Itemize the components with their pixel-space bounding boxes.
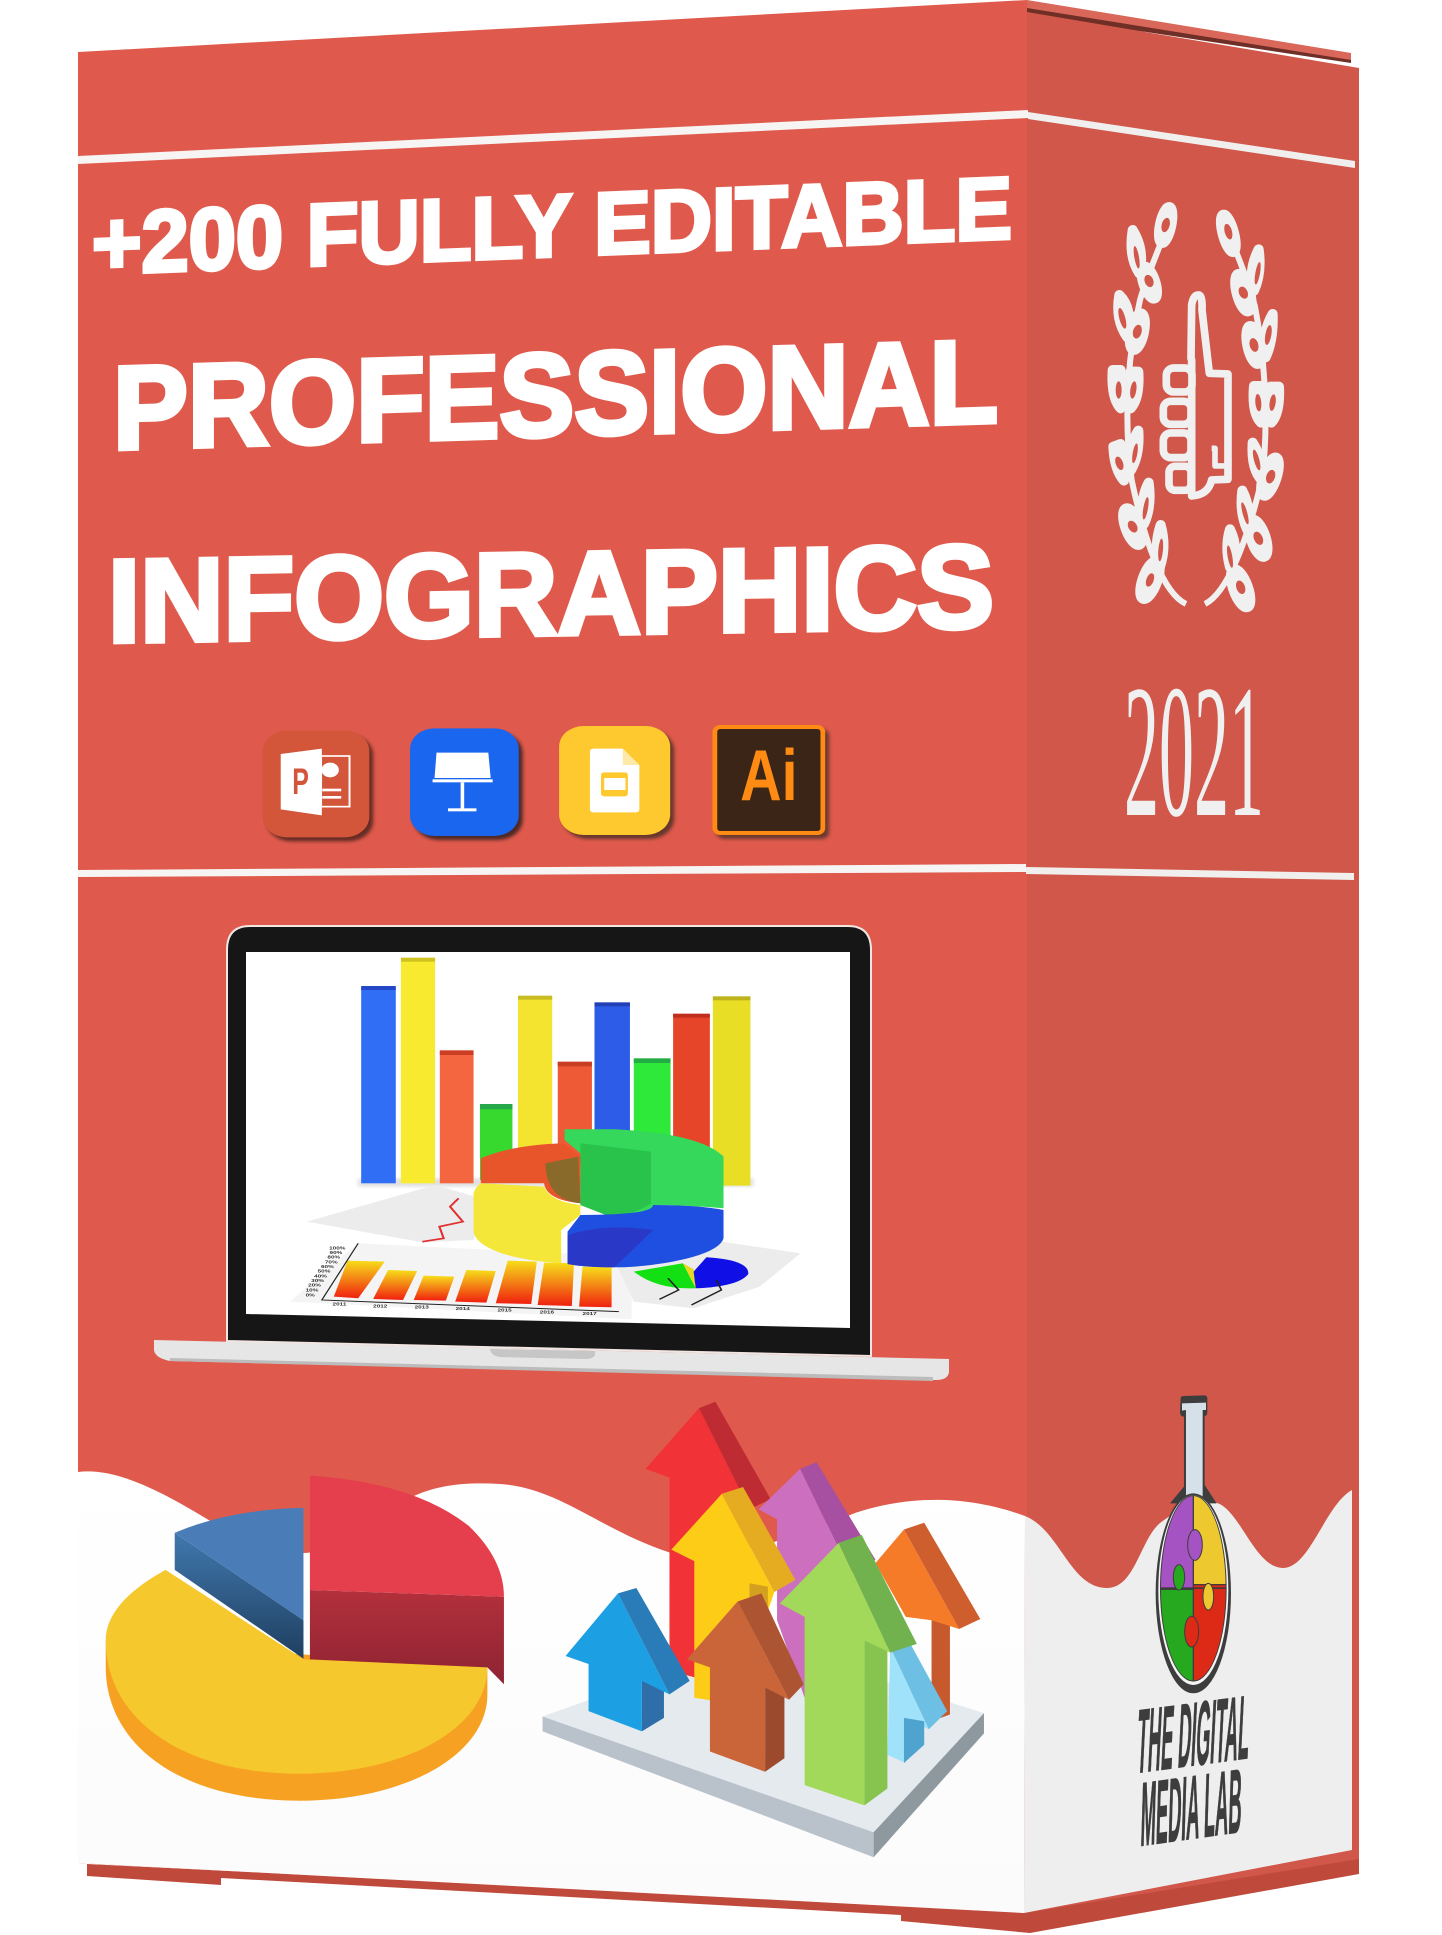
bar graph paper: 2017 xyxy=(583,1311,597,1317)
flask bulb xyxy=(1156,1493,1231,1693)
front white wave xyxy=(78,1471,1025,1913)
bar graph paper: 20% xyxy=(308,1283,321,1288)
bar graph paper: 2011 xyxy=(333,1302,347,1307)
laptop screen xyxy=(246,952,850,1328)
bar graph paper: 30% xyxy=(311,1278,324,1284)
puzzle pieces xyxy=(1160,1493,1227,1683)
flask logo xyxy=(1156,1395,1231,1693)
red arrow xyxy=(646,1402,771,1681)
3d arrows chart xyxy=(543,1402,984,1857)
box lid top edge xyxy=(1027,0,1351,63)
bar graph paper: 70% xyxy=(325,1260,338,1265)
box side panel xyxy=(1024,12,1359,1913)
icon: powerpoint xyxy=(263,731,373,841)
brown arrow xyxy=(687,1593,804,1772)
bar graph paper: 50% xyxy=(318,1269,330,1274)
icon: adobe illustrator xyxy=(715,727,829,839)
heading: professional: PROFESSIONAL xyxy=(113,316,998,475)
yellow arrow xyxy=(671,1487,795,1704)
green arrow xyxy=(780,1535,917,1805)
orange arrow xyxy=(875,1523,980,1721)
flask neck xyxy=(1170,1395,1217,1503)
purple arrow xyxy=(759,1462,875,1698)
screen chart image xyxy=(290,958,800,1319)
base plate xyxy=(543,1640,984,1857)
bar graph paper: 10% xyxy=(306,1288,318,1293)
bar graph paper: 80% xyxy=(327,1255,340,1260)
line graph paper xyxy=(307,1185,486,1242)
left laurel leaves xyxy=(1112,206,1175,601)
icon: google slides xyxy=(559,726,674,839)
software icons xyxy=(263,726,829,841)
laurel leaf holes xyxy=(1113,217,1277,595)
transparent 3d pie chart xyxy=(474,1129,724,1267)
side white wave xyxy=(1024,1490,1352,1913)
bar graph paper: 2012 xyxy=(373,1304,387,1309)
bar graph paper: 100% xyxy=(329,1246,345,1251)
laptop xyxy=(154,926,949,1381)
divider bands xyxy=(78,110,1355,880)
bar graph paper: 2015 xyxy=(497,1308,513,1313)
laptop base xyxy=(154,1340,949,1381)
heading: infographics: INFOGRAPHICS xyxy=(108,521,994,668)
laurel stems xyxy=(1127,223,1266,604)
right laurel leaves xyxy=(1218,213,1283,610)
light blue arrow xyxy=(887,1644,947,1763)
laureled thumbs up emblem xyxy=(1112,206,1283,610)
icon: powerpoint: P xyxy=(292,761,309,802)
bar graph paper xyxy=(290,1243,632,1319)
blue slice xyxy=(175,1508,303,1659)
bar graph paper: 2014 xyxy=(456,1306,471,1312)
thumbs up hand xyxy=(1163,295,1228,496)
icon: keynote xyxy=(410,728,523,840)
yellow slice xyxy=(106,1570,487,1801)
bar graph paper: 2016 xyxy=(540,1310,554,1315)
bar graph paper: 60% xyxy=(321,1264,334,1270)
3d bar chart xyxy=(358,958,753,1187)
bar graph paper: 0% xyxy=(306,1293,315,1298)
box front panel xyxy=(78,0,1027,1913)
box base xyxy=(87,1858,1359,1933)
bar graph paper: 2013 xyxy=(415,1305,429,1310)
icon: adobe illustrator: Ai xyxy=(740,734,798,815)
bar graph paper: 40% xyxy=(314,1274,327,1279)
heading: +200 fully editable: +200 FULLY EDITABLE xyxy=(92,158,1012,293)
pie chart xyxy=(106,1476,504,1801)
blue arrow xyxy=(566,1588,690,1731)
red slice xyxy=(310,1476,504,1684)
laptop bezel xyxy=(227,926,871,1356)
bar graph paper: 90% xyxy=(330,1250,342,1256)
small pie paper xyxy=(615,1242,800,1308)
